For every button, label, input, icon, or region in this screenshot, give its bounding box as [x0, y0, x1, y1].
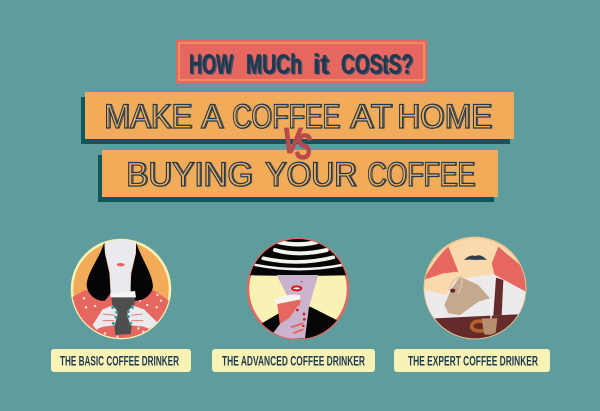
face and neck [273, 275, 318, 338]
title badge: HOW [190, 50, 235, 80]
banner: buying your coffee: YOUR [266, 156, 358, 194]
banner: make a coffee at home: MAKE [105, 98, 193, 136]
banner: make a coffee at home: AT [351, 98, 393, 136]
nails [111, 306, 134, 325]
title badge: COStS? [342, 50, 414, 80]
pitcher handle [449, 277, 462, 293]
dress [72, 290, 169, 338]
jacket [262, 306, 337, 339]
title badge [176, 40, 427, 83]
hand [274, 305, 304, 339]
icon: basic coffee drinker [70, 238, 173, 343]
coffee cup [482, 318, 497, 335]
banner: make a coffee at home: A [202, 98, 224, 136]
title badge: it [313, 48, 329, 80]
banner: buying your coffee: BUYING [126, 156, 253, 194]
hand [424, 280, 456, 295]
title badge: MUCh [246, 48, 302, 80]
icon: expert coffee drinker [420, 238, 530, 343]
cup lid [110, 291, 136, 297]
dress dots [83, 294, 162, 338]
pitcher [444, 277, 490, 315]
finger detail [450, 289, 455, 293]
banner: buying your coffee: YOUR [265, 156, 357, 194]
apron [434, 314, 518, 338]
nails [296, 309, 306, 327]
banner: make a coffee at home: A [201, 98, 223, 136]
title badge: HOW [189, 48, 233, 80]
banner: make a coffee at home: AT [350, 98, 392, 136]
label: advanced coffee drinker [212, 349, 375, 372]
shoulders [423, 247, 458, 280]
saucer and handle [472, 321, 483, 331]
banner: buying your coffee: COFFEE [368, 156, 476, 194]
coffee cup [277, 299, 301, 326]
banner: make a coffee at home: HOME [398, 98, 493, 136]
label: expert coffee drinker [394, 349, 550, 372]
banner: buying your coffee: COFFEE [367, 156, 475, 194]
banner: make a coffee at home: HOME [397, 98, 492, 136]
shirt [420, 274, 530, 320]
moustache [464, 255, 487, 260]
banner: make a coffee at home: COFFEE [232, 98, 340, 136]
right hand [127, 305, 160, 329]
vs mark [282, 120, 312, 167]
icon: advanced coffee drinker [246, 238, 350, 340]
left hand [93, 305, 118, 329]
hat stripes [256, 242, 342, 269]
banner: make a coffee at home [81, 92, 514, 144]
hair [87, 242, 111, 301]
beauty mark [301, 281, 302, 282]
apron strap [493, 278, 503, 315]
lips [291, 285, 302, 291]
banner: buying your coffee [98, 150, 498, 202]
banner: make a coffee at home: COFFEE [233, 98, 341, 136]
vs mark: S [295, 126, 312, 167]
face and neck [104, 238, 137, 295]
label: advanced coffee drinker: THE ADVANCED COFFEE DRINKER [222, 354, 365, 368]
cup lid [274, 295, 301, 304]
title badge: MUCh [248, 50, 304, 80]
finger stripes [291, 323, 303, 333]
label: basic coffee drinker [51, 349, 191, 372]
banner: make a coffee at home: MAKE [104, 98, 192, 136]
lips [117, 263, 125, 266]
title badge: COStS? [341, 48, 413, 80]
banner: buying your coffee: BUYING [127, 156, 254, 194]
finger gaps [103, 314, 143, 321]
milk stream [490, 298, 491, 319]
hat [250, 239, 346, 276]
label: basic coffee drinker: THE BASIC COFFEE DRINKER [60, 354, 179, 368]
title badge: it [314, 50, 330, 80]
vs mark: V [282, 120, 303, 161]
coffee cup [111, 297, 135, 335]
